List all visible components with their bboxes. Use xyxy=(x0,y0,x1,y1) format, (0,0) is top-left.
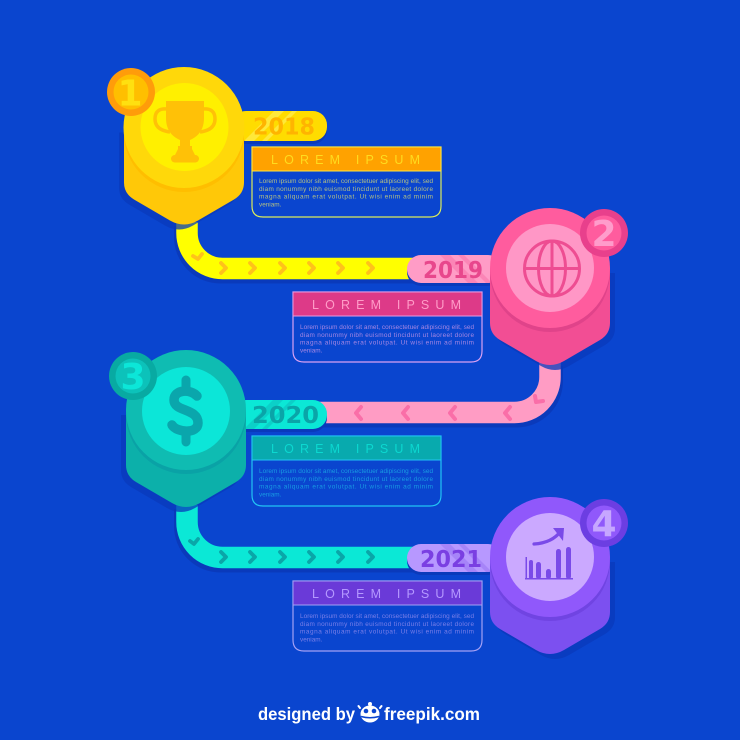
badge 1 xyxy=(107,68,155,116)
badge 3: 3 xyxy=(120,357,146,398)
text panel: 2021: diam nonummy nibh euismod tincidunt ut laoreet dolore xyxy=(300,621,474,628)
badge 4: 4 xyxy=(591,504,617,545)
connector: yellow path 2018 to 2019 xyxy=(185,222,420,273)
icon: trophy xyxy=(155,101,215,162)
text panel: 2019: Lorem ipsum dolor sit amet, consectetuer adipiscing elit, sed xyxy=(300,324,474,331)
year pill: 2018: 2018 xyxy=(253,112,315,140)
icon: globe xyxy=(524,241,580,296)
text panel: 2018: diam nonummy nibh euismod tincidunt ut laoreet dolore xyxy=(259,186,433,193)
text panel: 2020: magna aliquam erat volutpat. Ut wisi enim ad minim xyxy=(259,484,433,490)
text panel: 2021: LOREM IPSUM xyxy=(312,587,461,601)
text panel: 2021: magna aliquam erat volutpat. Ut wisi enim ad minim xyxy=(300,628,474,636)
year pill: 2021: 2021 xyxy=(420,545,482,573)
node 2: pink marker with globe xyxy=(490,208,615,370)
node 1: yellow marker with trophy xyxy=(119,67,244,230)
badge 4 xyxy=(580,499,628,547)
footer credit: designed by xyxy=(258,704,355,724)
year pill: 2020: 2020 xyxy=(252,401,319,429)
node 4: purple marker with growth chart xyxy=(490,497,615,659)
badge 2: 2 xyxy=(591,214,617,255)
text panel: 2019 xyxy=(293,292,482,362)
year pill: 2018 xyxy=(242,111,327,144)
text panel: 2018: veniam. xyxy=(259,202,282,208)
icon: freepik logo xyxy=(358,702,382,722)
year pill: 2020 xyxy=(245,400,327,432)
connector: pink path 2019 to 2020 xyxy=(310,362,552,419)
badge 2 xyxy=(580,209,628,257)
text panel: 2019: magna aliquam erat volutpat. Ut wisi enim ad minim xyxy=(300,340,474,346)
text panel: 2021 xyxy=(293,581,482,651)
badge 1: 1 xyxy=(117,74,143,114)
connector: teal path 2020 to 2021 xyxy=(185,505,420,562)
text panel: 2020: diam nonummy nibh euismod tincidunt ut laoreet dolore xyxy=(259,476,433,483)
text panel: 2020: Lorem ipsum dolor sit amet, consectetuer adipiscing elit, sed xyxy=(259,468,433,475)
icon: dollar sign xyxy=(172,380,198,442)
badge 3 xyxy=(109,352,157,400)
footer credit xyxy=(258,702,480,724)
text panel: 2020 xyxy=(252,436,441,506)
text panel: 2019: veniam. xyxy=(300,348,323,354)
year pill: 2019: 2019 xyxy=(423,256,483,284)
text panel: 2021: veniam. xyxy=(300,636,323,644)
footer credit: freepik.com xyxy=(384,704,480,724)
text panel: 2021: Lorem ipsum dolor sit amet, consectetuer adipiscing elit, sed xyxy=(300,613,474,620)
text panel: 2020: LOREM IPSUM xyxy=(271,442,420,456)
icon: growth chart xyxy=(525,528,573,580)
year pill: 2021 xyxy=(407,544,492,575)
text panel: 2018: LOREM IPSUM xyxy=(271,153,420,167)
text panel: 2019: diam nonummy nibh euismod tincidunt ut laoreet dolore xyxy=(300,332,474,339)
text panel: 2018: Lorem ipsum dolor sit amet, consectetuer adipiscing elit, sed xyxy=(259,178,433,185)
text panel: 2018: magna aliquam erat volutpat. Ut wisi enim ad minim xyxy=(259,194,433,200)
text panel: 2019: LOREM IPSUM xyxy=(312,298,461,312)
node 3: teal marker with dollar sign xyxy=(121,350,246,512)
year pill: 2019 xyxy=(407,255,492,286)
text panel: 2018 xyxy=(252,147,441,217)
text panel: 2020: veniam. xyxy=(259,492,282,498)
